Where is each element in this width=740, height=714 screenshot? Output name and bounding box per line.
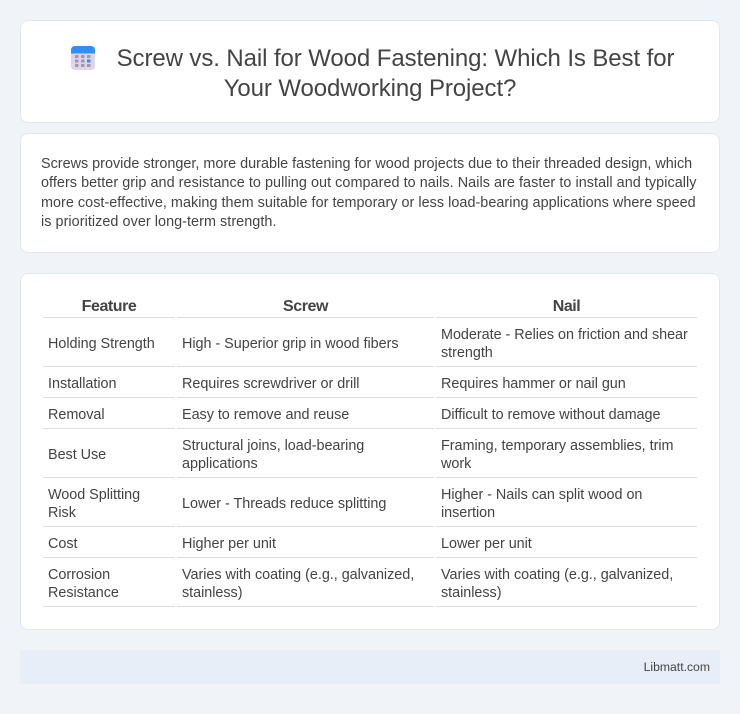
row: Corrosion Resistance — [48, 567, 119, 601]
comparison table: strength — [441, 345, 493, 361]
row: Best Use: Best Use — [48, 447, 106, 463]
comparison table: stainless) — [441, 585, 501, 601]
comparison table: applications — [182, 456, 258, 472]
column header: Feature: Feature — [82, 298, 136, 315]
comparison table: insertion — [441, 505, 495, 521]
row: Removal: Removal — [48, 407, 105, 423]
comparison table: Requires hammer or nail gun — [441, 376, 626, 392]
summary text: Screws provide stronger, more durable fastening for wood projects due to their threaded design, which — [41, 156, 692, 172]
footer: source: Libmatt.com — [644, 660, 710, 674]
comparison table: Varies with coating (e.g., galvanized, — [441, 567, 673, 583]
panel: title card — [20, 20, 720, 123]
footer bar — [20, 650, 720, 684]
row: Wood Splitting Risk — [48, 487, 140, 521]
comparison table: Requires screwdriver or drill — [182, 376, 359, 392]
comparison table: Easy to remove and reuse — [182, 407, 349, 423]
panel: summary card — [20, 133, 720, 253]
comparison table: stainless) — [182, 585, 242, 601]
row: Corrosion Resistance: Resistance — [48, 585, 119, 601]
comparison table: Lower - Threads reduce splitting — [182, 496, 386, 512]
title: Your Woodworking Project? — [224, 75, 516, 102]
column header: Screw: Screw — [283, 298, 328, 315]
row: Holding Strength: Holding Strength — [48, 336, 155, 352]
comparison table: Higher - Nails can split wood on — [441, 487, 642, 503]
comparison table: Varies with coating (e.g., galvanized, — [182, 567, 414, 583]
comparison table: Moderate - Relies on friction and shear — [441, 327, 688, 343]
row: Corrosion Resistance: Corrosion — [48, 567, 110, 583]
comparison table — [43, 298, 697, 607]
comparison table: Higher per unit — [182, 536, 276, 552]
comparison table: High - Superior grip in wood fibers — [182, 336, 399, 352]
summary text — [41, 156, 697, 230]
comparison table: Structural joins, load-bearing — [182, 438, 364, 454]
icon: calendar — [71, 46, 95, 70]
title — [117, 45, 674, 102]
panel: comparison table card — [20, 273, 720, 630]
comparison table: Framing, temporary assemblies, trim — [441, 438, 673, 454]
summary text: is prioritized over long-term strength. — [41, 214, 276, 230]
comparison table: work — [441, 456, 471, 472]
summary text: more cost-effective, making them suitable for temporary or less load-bearing applications where speed — [41, 195, 696, 211]
comparison table: Lower per unit — [441, 536, 532, 552]
comparison table: Difficult to remove without damage — [441, 407, 660, 423]
row: Cost: Cost — [48, 536, 77, 552]
column header: Nail: Nail — [553, 298, 580, 315]
row: Installation: Installation — [48, 376, 116, 392]
title: Screw vs. Nail for Wood Fastening: Which Is Best for — [117, 45, 674, 72]
row: Wood Splitting Risk: Risk — [48, 505, 76, 521]
row: Wood Splitting Risk: Wood Splitting — [48, 487, 140, 503]
summary text: offers better grip and resistance to pulling out compared to nails. Nails are faster to install and typically — [41, 175, 697, 191]
